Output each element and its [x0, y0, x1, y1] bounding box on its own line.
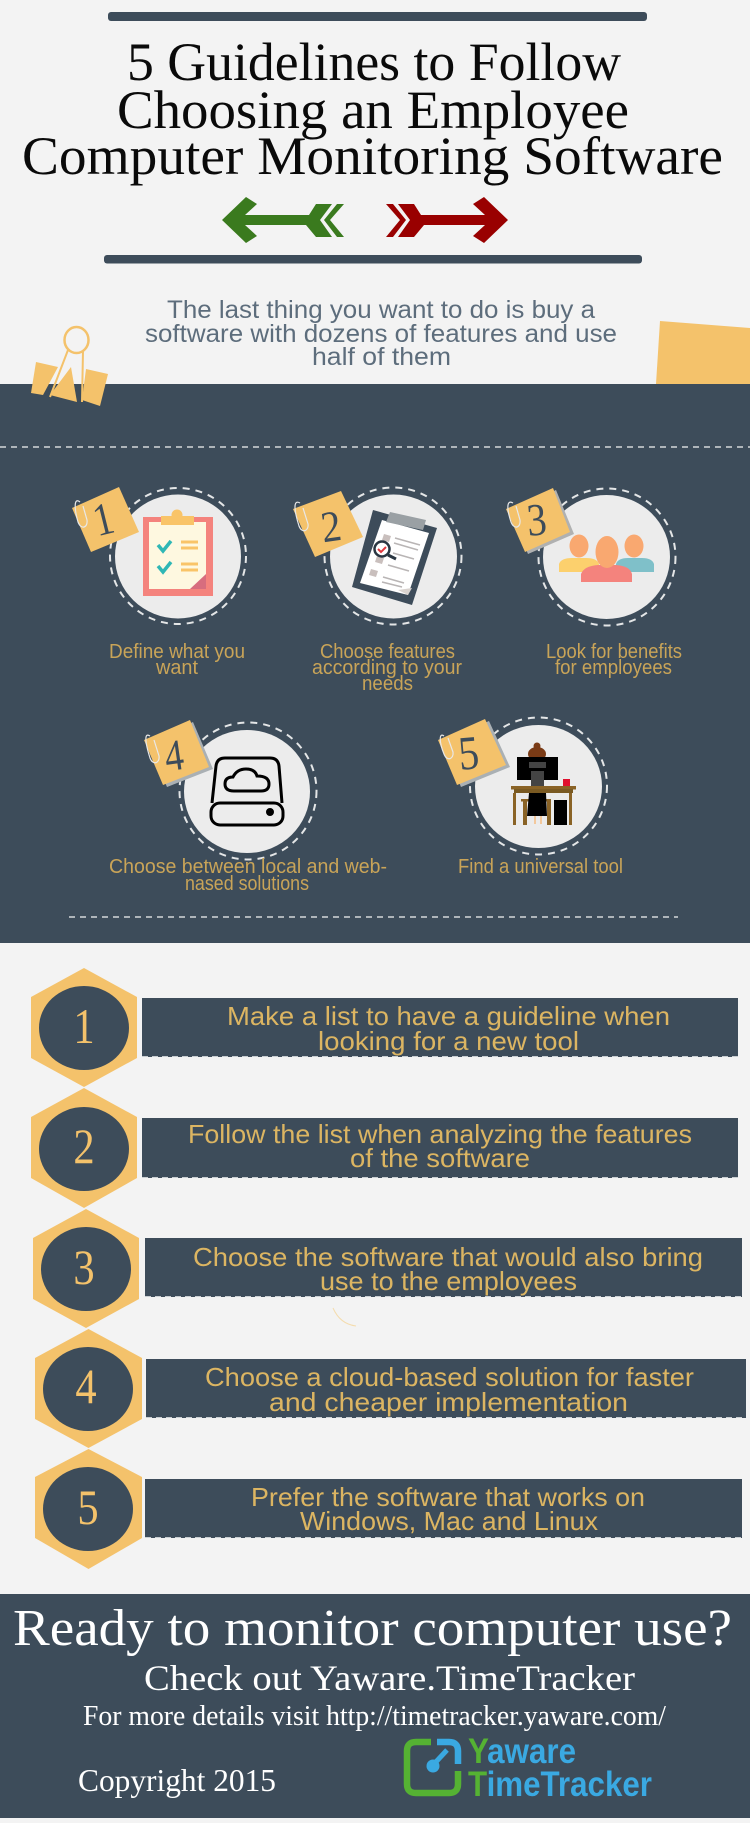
- title: Computer Monitoring Software: [22, 126, 723, 186]
- sticky note corner: [656, 321, 750, 384]
- note: number 5: 5: [456, 725, 481, 781]
- label: [109, 641, 245, 679]
- logo: Yaware TimeTracker: [407, 1732, 652, 1804]
- note: number 1: [72, 487, 139, 552]
- top divider bar: [108, 12, 647, 21]
- icon: clipboard checklist: [143, 510, 213, 596]
- note: number 3: 3: [525, 494, 549, 547]
- item 1: define what you want: [72, 487, 246, 679]
- footer details: For more details visit http://timetracker.yaware.com/: [83, 1701, 666, 1732]
- step 1: 1: [73, 1000, 95, 1055]
- step 2: of the software: [350, 1143, 530, 1173]
- item 3: look for benefits: [506, 488, 682, 679]
- label: [312, 641, 462, 695]
- step 3: Choose the software that would also bring: [193, 1242, 703, 1272]
- step 1: [31, 968, 738, 1087]
- icon: clipboard with magnifier: [352, 510, 437, 605]
- footer subheading: Check out Yaware.TimeTracker: [144, 1658, 635, 1698]
- label: nased solutions: [185, 873, 309, 895]
- title: Choosing an Employee: [117, 80, 629, 140]
- copyright: Copyright 2015: [78, 1762, 276, 1798]
- icon: three people: [559, 534, 654, 582]
- note: number 1: 1: [88, 493, 119, 547]
- label: needs: [362, 673, 413, 695]
- icon: cloud drive: [211, 758, 283, 825]
- step 1: looking for a new tool: [318, 1026, 579, 1056]
- intro text: [145, 296, 617, 371]
- label: [109, 856, 387, 895]
- intro text: half of them: [312, 343, 451, 371]
- step 3: 3: [73, 1241, 95, 1296]
- icon: green arrow pointing left: [222, 197, 344, 243]
- note: number 4: 4: [161, 730, 187, 781]
- label: according to your: [312, 657, 462, 679]
- note: number 2: 2: [318, 502, 344, 553]
- note: number 5: [438, 719, 510, 787]
- step 5: Windows, Mac and Linux: [300, 1506, 598, 1536]
- step 1: Make a list to have a guideline when: [227, 1001, 670, 1031]
- label: for employees: [555, 657, 672, 679]
- step 4: [35, 1329, 746, 1448]
- panel: dark features panel: [0, 384, 750, 943]
- label: want: [155, 657, 198, 679]
- small stray curve: [333, 1308, 356, 1326]
- intro text: software with dozens of features and use: [145, 320, 617, 348]
- icon: red arrow pointing right: [386, 197, 508, 243]
- step 2: 2: [73, 1120, 95, 1175]
- note: number 4: [144, 720, 213, 787]
- step 4: Choose a cloud-based solution for faster: [205, 1362, 694, 1392]
- title: [22, 32, 723, 186]
- label: Choose between local and web-: [109, 856, 387, 878]
- label: Look for benefits: [546, 641, 682, 663]
- step 5: Prefer the software that works on: [251, 1482, 645, 1512]
- label: Define what you: [109, 641, 245, 663]
- note: number 2: [293, 491, 363, 557]
- intro text: The last thing you want to do is buy a: [167, 296, 595, 324]
- lower divider bar: [104, 255, 642, 264]
- icon: person at desk: [511, 742, 576, 825]
- note: number 3: [506, 488, 574, 554]
- step 3: use to the employees: [320, 1266, 577, 1296]
- item 2: choose features: [293, 488, 462, 695]
- label: Find a universal tool: [458, 856, 623, 878]
- step 4: and cheaper implementation: [269, 1387, 628, 1417]
- step 2: Follow the list when analyzing the features: [188, 1119, 692, 1149]
- step 5: 5: [77, 1481, 99, 1536]
- logo: Yaware TimeTracker: Yaware: [468, 1732, 576, 1771]
- step 3: [33, 1209, 742, 1328]
- item 5: universal tool: [438, 718, 623, 878]
- logo: Yaware TimeTracker: TimeTracker: [468, 1765, 652, 1804]
- step 5: [35, 1449, 742, 1569]
- panel: footer call to action: [0, 1594, 750, 1818]
- item 4: local or web-based: [109, 720, 387, 895]
- footer headline: Ready to monitor computer use?: [13, 1600, 732, 1657]
- title: 5 Guidelines to Follow: [127, 32, 621, 92]
- step 4: 4: [75, 1360, 97, 1415]
- step 2: [31, 1088, 738, 1208]
- icon: binder clip: [31, 327, 108, 406]
- label: Choose features: [320, 641, 455, 663]
- label: [546, 641, 682, 679]
